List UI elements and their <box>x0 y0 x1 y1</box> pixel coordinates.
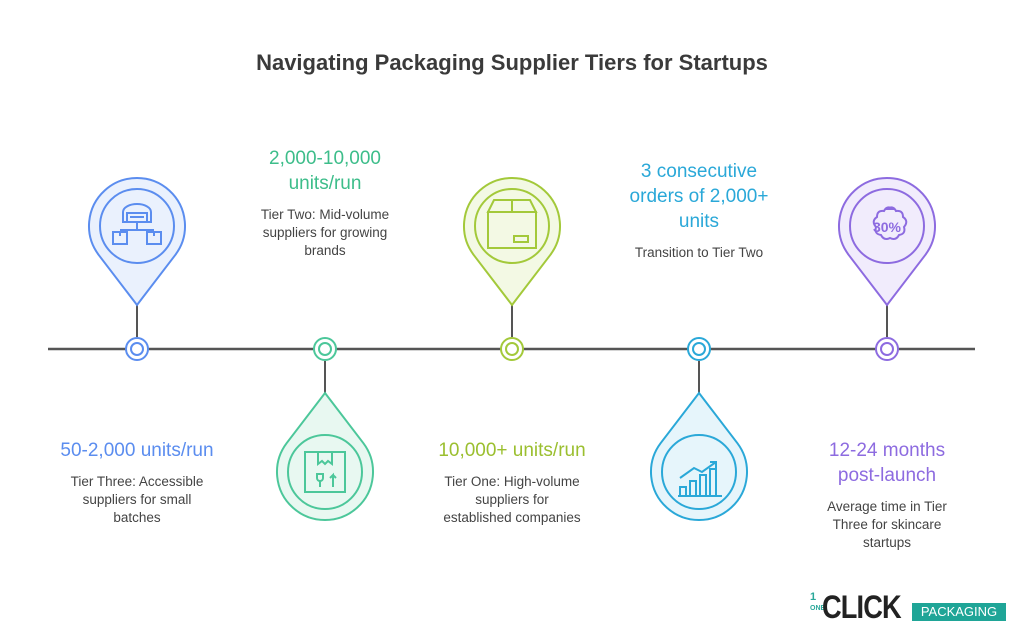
text block: tier one: suppliers for <box>475 492 549 507</box>
text block: time in tier three <box>827 440 947 550</box>
text block: tier two: brands <box>304 243 346 258</box>
text block: tier two <box>261 148 389 258</box>
text block: tier three: batches <box>113 510 161 525</box>
pin: time in tier three (purple): 30% <box>873 219 902 235</box>
text block: transition: 3 consecutive <box>641 161 757 182</box>
text block: tier two: suppliers for growing <box>263 225 387 240</box>
pin: transition (cyan) <box>651 338 747 520</box>
text block: tier one <box>438 440 586 525</box>
text block: time in tier three: 12-24 months <box>829 440 945 461</box>
text block: transition: units <box>679 211 719 232</box>
logo: 1 <box>810 591 816 603</box>
text block: tier three <box>60 440 214 525</box>
text block: tier three: Tier Three: Accessible <box>71 474 203 489</box>
text block: time in tier three: post-launch <box>838 465 936 486</box>
pin: time in tier three (purple) <box>839 178 935 360</box>
text block: tier one: 10,000+ units/run <box>438 440 586 461</box>
text block: time in tier three: Three for skincare <box>833 517 941 532</box>
logo: ONE <box>810 605 825 612</box>
pin: tier two (green) <box>277 338 373 520</box>
pin: tier three (blue) <box>89 178 185 360</box>
text block: transition <box>630 161 768 260</box>
logo <box>810 589 1006 625</box>
text block: transition: orders of 2,000+ <box>630 186 768 207</box>
text block: tier two: 2,000-10,000 <box>269 148 381 169</box>
logo: CLICK <box>822 589 901 625</box>
text block: tier two: units/run <box>289 173 361 194</box>
title: Navigating Packaging Supplier Tiers for Startups <box>256 50 768 75</box>
text block: transition: Transition to Tier Two <box>635 245 763 260</box>
text block: tier three: 50-2,000 units/run <box>60 440 214 461</box>
text block: tier two: Tier Two: Mid-volume <box>261 207 389 222</box>
pin: tier one (yellow-green) <box>464 178 560 360</box>
text block: time in tier three: startups <box>863 535 911 550</box>
text block: tier three: suppliers for small <box>83 492 191 507</box>
logo: PACKAGING <box>921 604 997 619</box>
text block: time in tier three: Average time in Tier <box>827 499 947 514</box>
text block: tier one: established companies <box>443 510 581 525</box>
text block: tier one: Tier One: High-volume <box>444 474 580 489</box>
